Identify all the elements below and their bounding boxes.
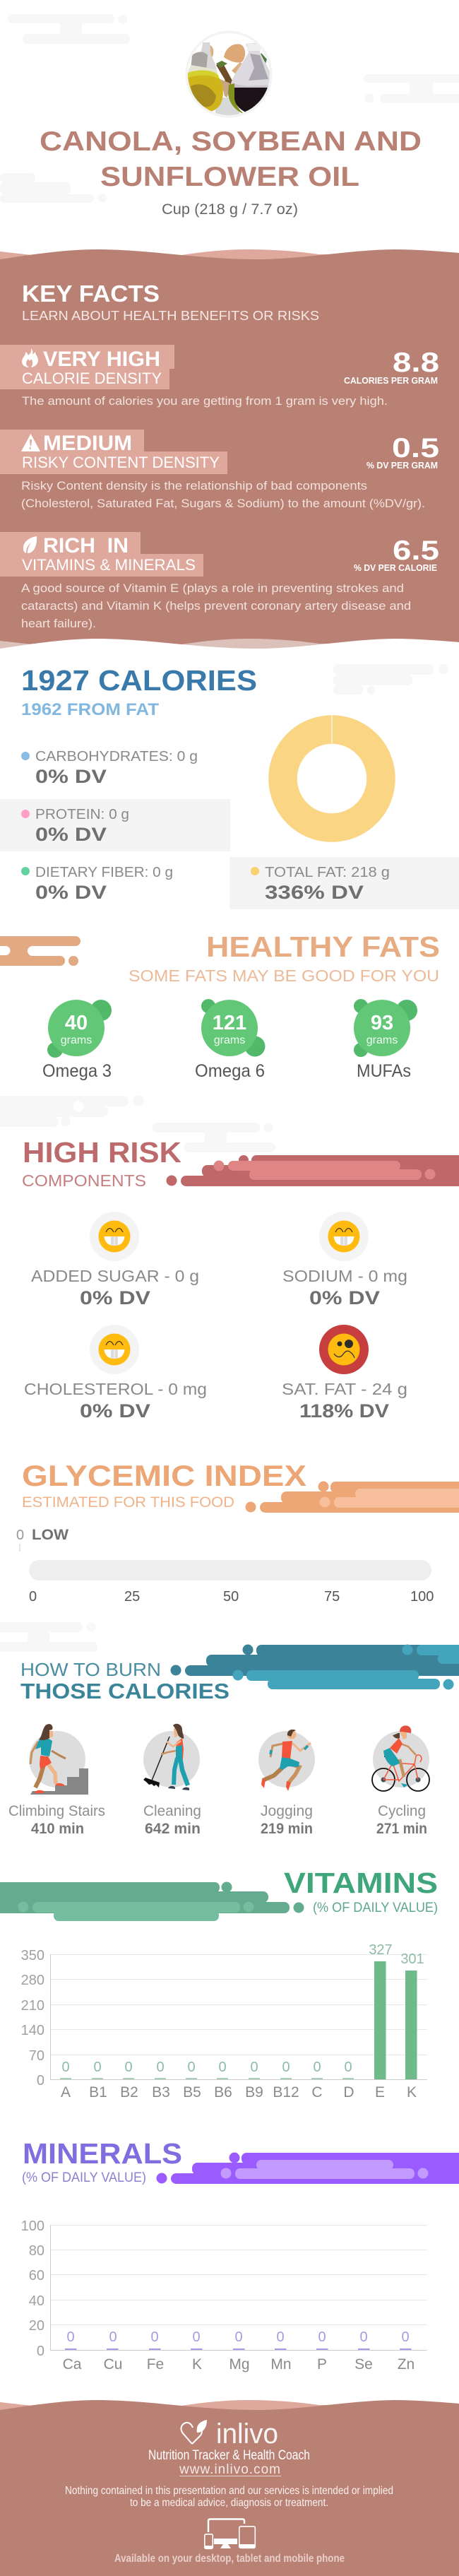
legend: dietary fiber bbox=[21, 865, 173, 903]
decorative cloud: above high risk left bbox=[0, 1095, 144, 1127]
legend: carbohydrates bbox=[21, 749, 198, 787]
title: SUNFLOWER OIL bbox=[100, 162, 359, 192]
bar chart: vitamins: 0 bbox=[124, 2060, 133, 2075]
description: A good source of Vitamin E (plays a role in preventing strokes and bbox=[21, 581, 404, 595]
bar chart: vitamins: 0 bbox=[313, 2060, 321, 2075]
icon: flame bbox=[22, 348, 38, 367]
icon: oil bottles photo bbox=[185, 31, 273, 117]
rating: RICH IN bbox=[43, 534, 129, 557]
value: 8.8: 8.8 bbox=[393, 348, 439, 378]
heading line 2: THOSE CALORIES bbox=[20, 1679, 230, 1703]
icon: leaf bbox=[23, 536, 37, 553]
legend: carbohydrates: 0% DV bbox=[35, 766, 107, 787]
bar chart: minerals: 40 bbox=[29, 2293, 44, 2309]
item: added sugar bbox=[31, 1212, 199, 1308]
description: The amount of calories you are getting from 1 gram is very high. bbox=[22, 394, 388, 408]
bar chart: vitamins: 327 bbox=[369, 1942, 393, 1958]
bar chart: minerals: 0 bbox=[359, 2329, 368, 2345]
fact: risky content density bbox=[0, 430, 439, 510]
value: 6.5: 6.5 bbox=[393, 536, 439, 566]
label: jogging: Jogging bbox=[261, 1803, 313, 1819]
bar chart: minerals: Mg bbox=[229, 2356, 250, 2373]
legend: protein: 0% DV bbox=[35, 824, 107, 845]
bar chart: vitamins: A bbox=[61, 2084, 71, 2101]
label: cleaning: 642 min bbox=[145, 1821, 201, 1837]
description: (Cholesterol, Saturated Fat, Sugars & Sodium) to the amount (%DV/gr). bbox=[21, 497, 425, 510]
label: climbing stairs bbox=[8, 1803, 105, 1837]
availability note: Available on your desktop, tablet and mobile phone bbox=[114, 2553, 345, 2565]
panel: healthy fats bbox=[0, 930, 440, 1081]
subheading: SOME FATS MAY BE GOOD FOR YOU bbox=[129, 967, 439, 985]
decorative bars bbox=[246, 1481, 459, 1513]
heading: HIGH RISK bbox=[23, 1136, 181, 1169]
panel: key facts bbox=[0, 249, 459, 672]
item: sodium: 0% DV bbox=[309, 1287, 380, 1308]
item: omega 3: Omega 3 bbox=[42, 1061, 112, 1081]
rating label: RISKY CONTENT DENSITY bbox=[22, 454, 220, 471]
legend: protein: PROTEIN: 0 g bbox=[35, 807, 129, 822]
item: cholesterol: 0% DV bbox=[80, 1400, 150, 1422]
rating: MEDIUM bbox=[43, 432, 132, 455]
bar chart: vitamins: 0 bbox=[218, 2060, 227, 2075]
bar chart: vitamins: K bbox=[407, 2084, 417, 2101]
tagline: Nutrition Tracker & Health Coach bbox=[148, 2448, 310, 2463]
bar chart: minerals: 0 bbox=[192, 2329, 201, 2345]
icon: devices bbox=[205, 2519, 255, 2548]
bar chart: minerals: 0 bbox=[37, 2344, 44, 2359]
bar chart: minerals: 0 bbox=[109, 2329, 117, 2345]
website link: www.inlivo.com bbox=[179, 2462, 280, 2477]
legend: total fat: TOTAL FAT: 218 g bbox=[265, 865, 390, 880]
bar chart: minerals: 0 bbox=[66, 2329, 75, 2345]
description bbox=[21, 581, 411, 630]
description: cataracts) and Vitamin K (helps prevent coronary artery disease and bbox=[21, 599, 411, 613]
heading: GLYCEMIC INDEX bbox=[22, 1459, 306, 1492]
label: cycling bbox=[376, 1803, 427, 1837]
bar chart: vitamins: D bbox=[343, 2084, 354, 2101]
subheading: from fat: 1962 FROM FAT bbox=[21, 700, 159, 719]
legend: total fat: 336% DV bbox=[265, 882, 364, 903]
disclaimer bbox=[65, 2485, 393, 2509]
gauge marker: 0 bbox=[16, 1528, 24, 1543]
disclaimer: Nothing contained in this presentation and our services is intended or implied bbox=[65, 2485, 393, 2497]
decorative bars bbox=[157, 2152, 459, 2184]
panel: calories bbox=[0, 664, 459, 909]
bar chart: vitamins: 0 bbox=[37, 2073, 44, 2088]
description: Risky Content density is the relationship of bad components bbox=[21, 479, 367, 492]
decorative cloud: top left bbox=[8, 14, 130, 44]
bar chart: vitamins: B1 bbox=[89, 2084, 107, 2101]
rating label: VITAMINS & MINERALS bbox=[22, 556, 196, 574]
bar chart: vitamins: 140 bbox=[21, 2023, 44, 2038]
item: omega 6 bbox=[195, 999, 266, 1081]
label: climbing stairs: 410 min bbox=[31, 1821, 84, 1837]
heading line 1: HOW TO BURN bbox=[20, 1659, 161, 1680]
activity: cycling bbox=[372, 1725, 429, 1791]
bar chart: minerals: 60 bbox=[29, 2268, 44, 2283]
gauge scale: 100 bbox=[410, 1589, 434, 1605]
decorative cloud: top right bbox=[364, 74, 459, 103]
legend: dietary fiber: DIETARY FIBER: 0 g bbox=[35, 865, 173, 880]
description: heart failure). bbox=[21, 617, 96, 630]
bar chart: vitamins: 210 bbox=[21, 1998, 44, 2014]
legend: dietary fiber: 0% DV bbox=[35, 882, 107, 903]
rating label: CALORIE DENSITY bbox=[22, 370, 162, 387]
gauge scale: 50 bbox=[223, 1589, 239, 1605]
label: cycling: Cycling bbox=[378, 1803, 426, 1819]
bar chart: vitamins: 0 bbox=[344, 2060, 352, 2075]
decorative cloud: burn bbox=[0, 1622, 97, 1652]
disclaimer: to be a medical advice, diagnosis or treatment. bbox=[130, 2497, 328, 2509]
subheading: (% OF DAILY VALUE) bbox=[22, 2170, 146, 2185]
gauge marker: LOW bbox=[32, 1527, 68, 1543]
decorative cloud: mid left bbox=[0, 173, 107, 203]
label: cycling: 271 min bbox=[376, 1821, 427, 1837]
gauge marker bbox=[16, 1527, 68, 1552]
bar chart: minerals: Mn bbox=[270, 2356, 292, 2373]
bar chart: minerals: Cu bbox=[104, 2356, 122, 2373]
bar chart: vitamins: 0 bbox=[250, 2060, 258, 2075]
item: added sugar: ADDED SUGAR - 0 g bbox=[31, 1267, 199, 1285]
item: sodium bbox=[282, 1212, 407, 1308]
bar chart: vitamins: 0 bbox=[61, 2060, 70, 2075]
gauge scale: 25 bbox=[124, 1589, 140, 1605]
panel: how to burn those calories bbox=[8, 1645, 459, 1837]
decorative bars bbox=[0, 936, 81, 966]
item: mufas: grams bbox=[366, 1034, 398, 1046]
value: 0.5: 0.5 bbox=[392, 433, 439, 463]
decorative bars bbox=[167, 1155, 459, 1186]
panel: high risk bbox=[22, 1136, 459, 1422]
subheading: (% OF DAILY VALUE) bbox=[313, 1901, 438, 1915]
item: mufas: MUFAs bbox=[357, 1061, 411, 1081]
bar chart: minerals: P bbox=[317, 2356, 327, 2373]
rating: VERY HIGH bbox=[43, 348, 160, 371]
bar chart: minerals: K bbox=[192, 2356, 202, 2373]
unit: CALORIES PER GRAM bbox=[344, 375, 438, 386]
heading: HEALTHY FATS bbox=[206, 930, 440, 963]
panel: footer bbox=[0, 2400, 459, 2576]
logo: inlivo bbox=[181, 2418, 278, 2450]
bar chart: vitamins: B9 bbox=[245, 2084, 263, 2101]
label: cleaning: Cleaning bbox=[143, 1803, 201, 1819]
gauge scale bbox=[29, 1589, 434, 1605]
item: cholesterol bbox=[24, 1325, 207, 1422]
bar chart: vitamins: B2 bbox=[120, 2084, 138, 2101]
item: omega 3 bbox=[42, 1000, 112, 1081]
decorative bars bbox=[0, 1882, 304, 1921]
bar chart: vitamins: 0 bbox=[93, 2060, 102, 2075]
fact: vitamins and minerals bbox=[0, 532, 439, 630]
label: climbing stairs: Climbing Stairs bbox=[8, 1803, 105, 1819]
decorative bars bbox=[171, 1645, 459, 1690]
bar chart: vitamins: E bbox=[375, 2084, 385, 2101]
bar chart: minerals: 0 bbox=[150, 2329, 159, 2345]
bar chart: minerals: Se bbox=[354, 2356, 373, 2373]
bar chart: minerals: 0 bbox=[234, 2329, 243, 2345]
item: omega 6: Omega 6 bbox=[195, 1061, 265, 1081]
bar chart: vitamins: C bbox=[311, 2084, 323, 2101]
item: omega 3: 40 bbox=[65, 1012, 88, 1034]
legend: total fat bbox=[230, 857, 459, 909]
unit: % DV PER GRAM bbox=[366, 460, 438, 471]
panel: vitamins bbox=[0, 1867, 438, 2101]
bar chart: minerals bbox=[21, 2218, 427, 2373]
bar chart: minerals: Zn bbox=[398, 2356, 415, 2373]
subheading: ESTIMATED FOR THIS FOOD bbox=[22, 1494, 234, 1511]
title bbox=[40, 126, 422, 192]
item: mufas bbox=[354, 999, 417, 1081]
activity: cleaning bbox=[143, 1724, 200, 1790]
serving size: Cup (218 g / 7.7 oz) bbox=[162, 201, 298, 218]
bar chart: vitamins: 350 bbox=[21, 1948, 44, 1963]
item: saturated fat bbox=[282, 1325, 407, 1422]
item: cholesterol: CHOLESTEROL - 0 mg bbox=[24, 1380, 207, 1398]
bar chart: vitamins: 0 bbox=[156, 2060, 165, 2075]
label: jogging bbox=[261, 1803, 313, 1837]
item: saturated fat: 118% DV bbox=[299, 1400, 389, 1422]
decorative cloud: calories bbox=[333, 664, 448, 695]
heading: MINERALS bbox=[23, 2137, 182, 2170]
legend: carbohydrates: CARBOHYDRATES: 0 g bbox=[35, 749, 198, 764]
panel: minerals bbox=[21, 2137, 459, 2373]
description bbox=[21, 479, 425, 510]
item: sodium: SODIUM - 0 mg bbox=[282, 1267, 407, 1285]
bar chart: minerals: 0 bbox=[401, 2329, 410, 2345]
label: jogging: 219 min bbox=[261, 1821, 313, 1837]
item: saturated fat: SAT. FAT - 24 g bbox=[282, 1380, 407, 1398]
unit: % DV PER CALORIE bbox=[354, 562, 437, 573]
gauge scale: 0 bbox=[29, 1589, 37, 1605]
item: added sugar: 0% DV bbox=[80, 1287, 150, 1308]
gauge bar bbox=[29, 1560, 431, 1581]
decorative cloud: above high risk right bbox=[153, 1123, 275, 1152]
bar chart: vitamins: 280 bbox=[21, 1973, 44, 1988]
title: CANOLA, SOYBEAN AND bbox=[40, 126, 422, 157]
bar chart: vitamins: 70 bbox=[29, 2048, 44, 2064]
legend: protein bbox=[0, 799, 230, 851]
icon: warning triangle bbox=[21, 434, 40, 451]
bar chart: minerals: Ca bbox=[63, 2356, 82, 2373]
bar chart: minerals: 20 bbox=[29, 2318, 44, 2334]
activity: climbing stairs bbox=[29, 1724, 88, 1795]
bar chart: vitamins bbox=[21, 1942, 427, 2101]
bar chart: vitamins: 0 bbox=[187, 2060, 196, 2075]
bar chart: minerals: 0 bbox=[276, 2329, 285, 2345]
subheading: COMPONENTS bbox=[22, 1171, 146, 1190]
item: omega 6: 121 bbox=[213, 1012, 246, 1034]
bar chart: minerals: Fe bbox=[147, 2356, 164, 2373]
bar chart: vitamins: B6 bbox=[214, 2084, 232, 2101]
item: omega 3: grams bbox=[61, 1034, 92, 1046]
bar chart: vitamins: 301 bbox=[400, 1951, 424, 1967]
gauge scale: 75 bbox=[324, 1589, 340, 1605]
panel: glycemic index bbox=[16, 1459, 459, 1605]
fact: calorie density bbox=[0, 345, 439, 408]
bar chart: vitamins: B3 bbox=[152, 2084, 170, 2101]
bar chart: vitamins: B5 bbox=[183, 2084, 201, 2101]
heading: VITAMINS bbox=[284, 1867, 438, 1899]
bar chart: minerals: 0 bbox=[318, 2329, 326, 2345]
activity: jogging bbox=[258, 1730, 315, 1791]
item: omega 6: grams bbox=[214, 1034, 245, 1046]
bar chart: vitamins: 0 bbox=[282, 2060, 290, 2075]
subheading: key facts: LEARN ABOUT HEALTH BENEFITS OR RISKS bbox=[22, 308, 319, 323]
heading: key facts: KEY FACTS bbox=[22, 280, 160, 307]
bar chart: minerals: 80 bbox=[29, 2243, 44, 2259]
bar chart: minerals: 100 bbox=[21, 2218, 44, 2234]
item: mufas: 93 bbox=[371, 1012, 393, 1034]
label: cleaning bbox=[143, 1803, 201, 1837]
donut chart bbox=[282, 714, 381, 828]
heading: calories: 1927 CALORIES bbox=[21, 664, 257, 697]
logo: inlivo: inlivo bbox=[216, 2418, 278, 2450]
bar chart: vitamins: B12 bbox=[273, 2084, 299, 2101]
